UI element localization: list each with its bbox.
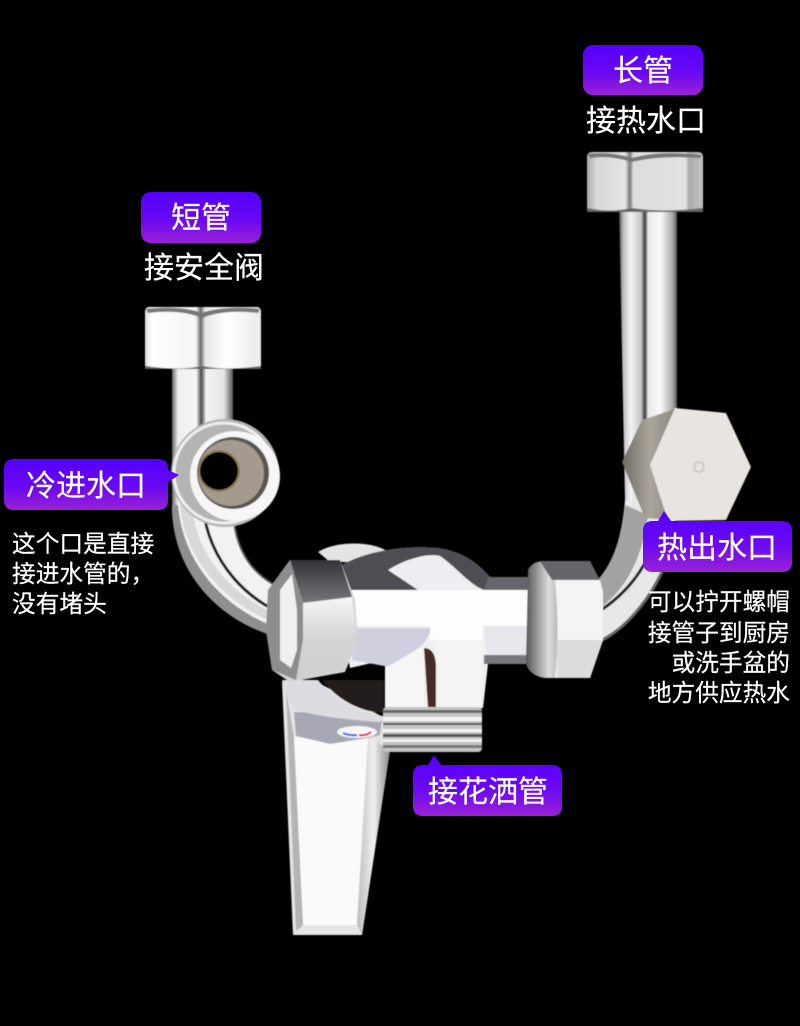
text: connect safety valve: 接安全阀	[144, 252, 264, 285]
text block: cold inlet note: 接进水管的，	[12, 561, 154, 588]
handle lever	[282, 680, 390, 935]
callout: shower hose connection	[413, 755, 562, 816]
threaded shower outlet	[383, 707, 482, 752]
text block: cold inlet note: 没有堵头	[12, 591, 107, 618]
text block: cold inlet note	[12, 531, 154, 618]
wall plate behind body	[318, 543, 385, 562]
temperature indicator on handle	[337, 726, 377, 738]
text: connect hot water inlet: 接热水口	[586, 105, 706, 138]
callout: long pipe: 长管	[613, 55, 673, 88]
text block: hot outlet note: 或洗手盆的	[672, 650, 790, 677]
callout: hot water outlet	[643, 511, 792, 572]
callout: cold water inlet	[4, 459, 179, 510]
callout: long pipe	[583, 45, 703, 95]
callout: shower hose connection: 接花洒管	[428, 776, 548, 809]
callout: hot water outlet: 热出水口	[657, 532, 777, 565]
text block: hot outlet note: 接管子到厨房	[648, 620, 790, 647]
callout: short pipe: 短管	[171, 202, 231, 235]
left hex nut	[266, 560, 358, 682]
text block: hot outlet note	[648, 589, 790, 707]
text block: hot outlet note: 可以拧开螺帽	[648, 589, 790, 616]
text block: hot outlet note: 地方供应热水	[648, 680, 790, 707]
right hex nut	[526, 561, 603, 678]
threaded hex cap on hot outlet	[622, 408, 751, 521]
top nut on long pipe	[587, 152, 703, 212]
callout: cold water inlet: 冷进水口	[26, 470, 146, 503]
text block: cold inlet note: 这个口是直接	[12, 531, 154, 558]
cold water inlet fitting	[171, 419, 280, 527]
top nut on short pipe	[145, 307, 261, 369]
callout: short pipe	[141, 192, 261, 243]
valve body	[340, 547, 540, 708]
long hot pipe	[596, 208, 677, 642]
faucet product image	[145, 152, 751, 935]
short cold pipe	[172, 365, 300, 642]
